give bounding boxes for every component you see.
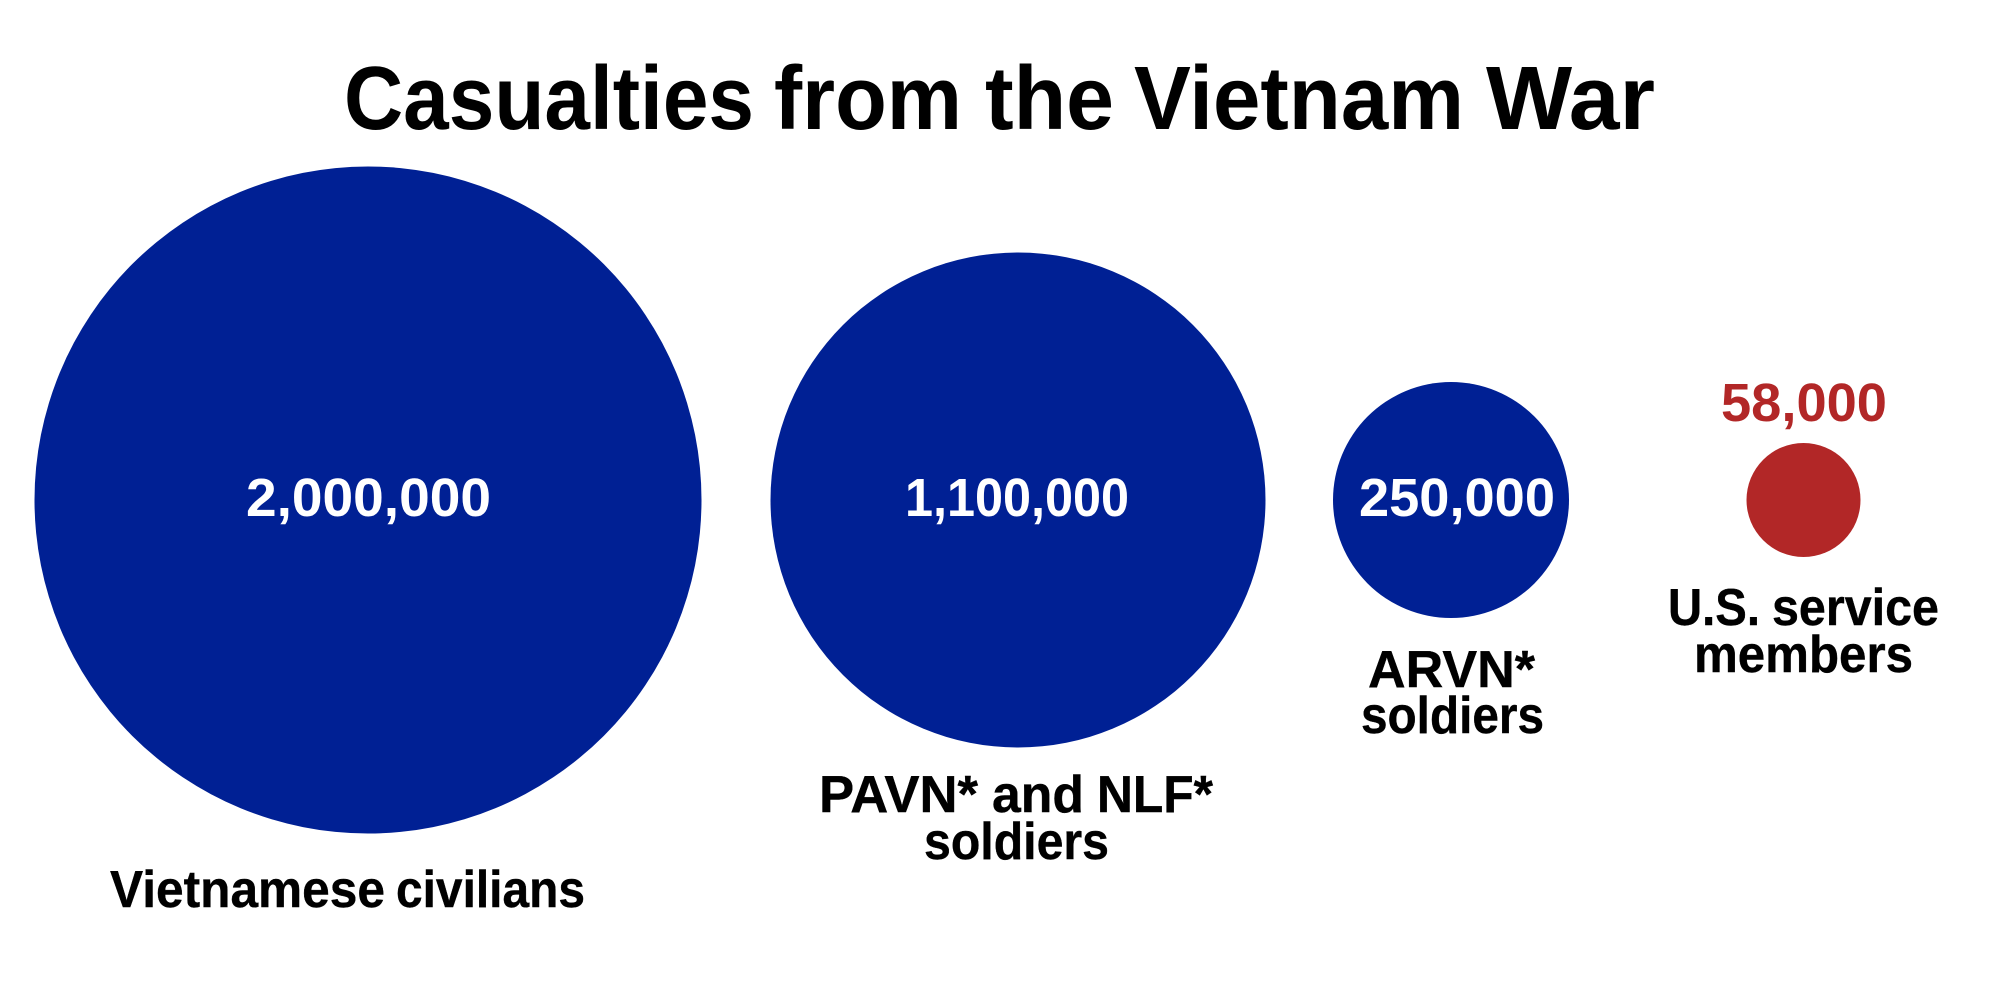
panel: U.S. service members	[1668, 373, 1939, 684]
title: Vietnam	[1134, 49, 1464, 149]
value: 58,000: 58,000	[1721, 373, 1887, 433]
circle: U.S. service members	[1746, 443, 1860, 557]
panel: Vietnamese civilians	[34, 166, 702, 919]
label: Vietnamese civilians	[110, 861, 585, 919]
label: PAVN and NLF soldiers: soldiers	[924, 813, 1109, 871]
label: U.S. service members: U.S.	[1668, 579, 1760, 637]
label: Vietnamese civilians: Vietnamese	[110, 861, 385, 919]
label: U.S. service members	[1668, 579, 1939, 684]
label: U.S. service members: service	[1772, 579, 1939, 637]
value: 1,100,000: 1,100,000	[905, 468, 1129, 528]
label: PAVN and NLF soldiers: and	[992, 766, 1084, 824]
title	[344, 49, 1655, 149]
label: Vietnamese civilians: civilians	[396, 861, 585, 919]
value: 250,000: 250,000	[1359, 468, 1555, 528]
title: from	[774, 49, 962, 149]
panel: PAVN and NLF soldiers	[770, 252, 1266, 871]
value: 2,000,000: 2,000,000	[246, 468, 491, 528]
title: the	[985, 49, 1114, 149]
label: ARVN soldiers	[1361, 641, 1544, 745]
label: PAVN and NLF soldiers: PAVN*	[819, 766, 979, 824]
label: U.S. service members: members	[1694, 626, 1913, 684]
circle: PAVN and NLF soldiers	[770, 252, 1266, 748]
label: ARVN soldiers: soldiers	[1361, 687, 1544, 745]
circle: ARVN soldiers	[1333, 382, 1569, 618]
label: ARVN soldiers: ARVN*	[1368, 641, 1536, 699]
title: War	[1486, 49, 1655, 149]
circle: Vietnamese civilians	[34, 166, 702, 834]
panel: ARVN soldiers	[1333, 382, 1569, 745]
title: Casualties	[344, 49, 754, 149]
label: PAVN and NLF soldiers	[819, 766, 1214, 871]
label: PAVN and NLF soldiers: NLF*	[1097, 766, 1214, 824]
